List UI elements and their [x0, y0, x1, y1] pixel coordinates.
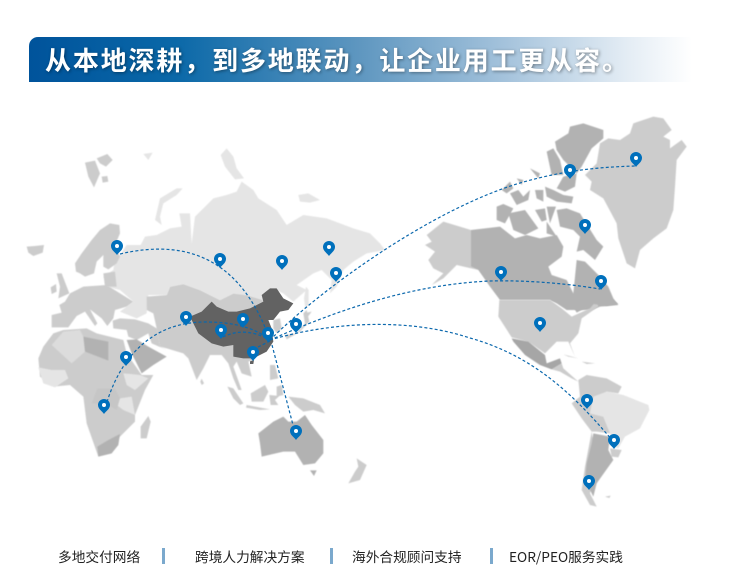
- title text: 从本地深耕，到多地联动，让企业用工更从容。: [45, 41, 630, 78]
- landmass: Greenland and Canada: [425, 117, 687, 310]
- landmass: USA, Mexico, South America: [498, 300, 649, 507]
- footer label: overseas compliance: 海外合规顾问支持: [352, 546, 462, 566]
- footer label: delivery network: 多地交付网络: [58, 546, 140, 566]
- landmass: southern Eurasia, Africa, Oceania: [38, 284, 367, 483]
- title banner: [29, 37, 692, 82]
- footer label: cross-border HR: 跨境人力解决方案: [195, 546, 305, 566]
- footer label: EOR/PEO practice: EOR/PEO服务实践: [509, 546, 623, 566]
- landmass: northern Eurasia: [27, 148, 385, 318]
- China highlighted: [190, 288, 293, 364]
- dashed route lines: [107, 166, 636, 440]
- location pins: [98, 152, 642, 490]
